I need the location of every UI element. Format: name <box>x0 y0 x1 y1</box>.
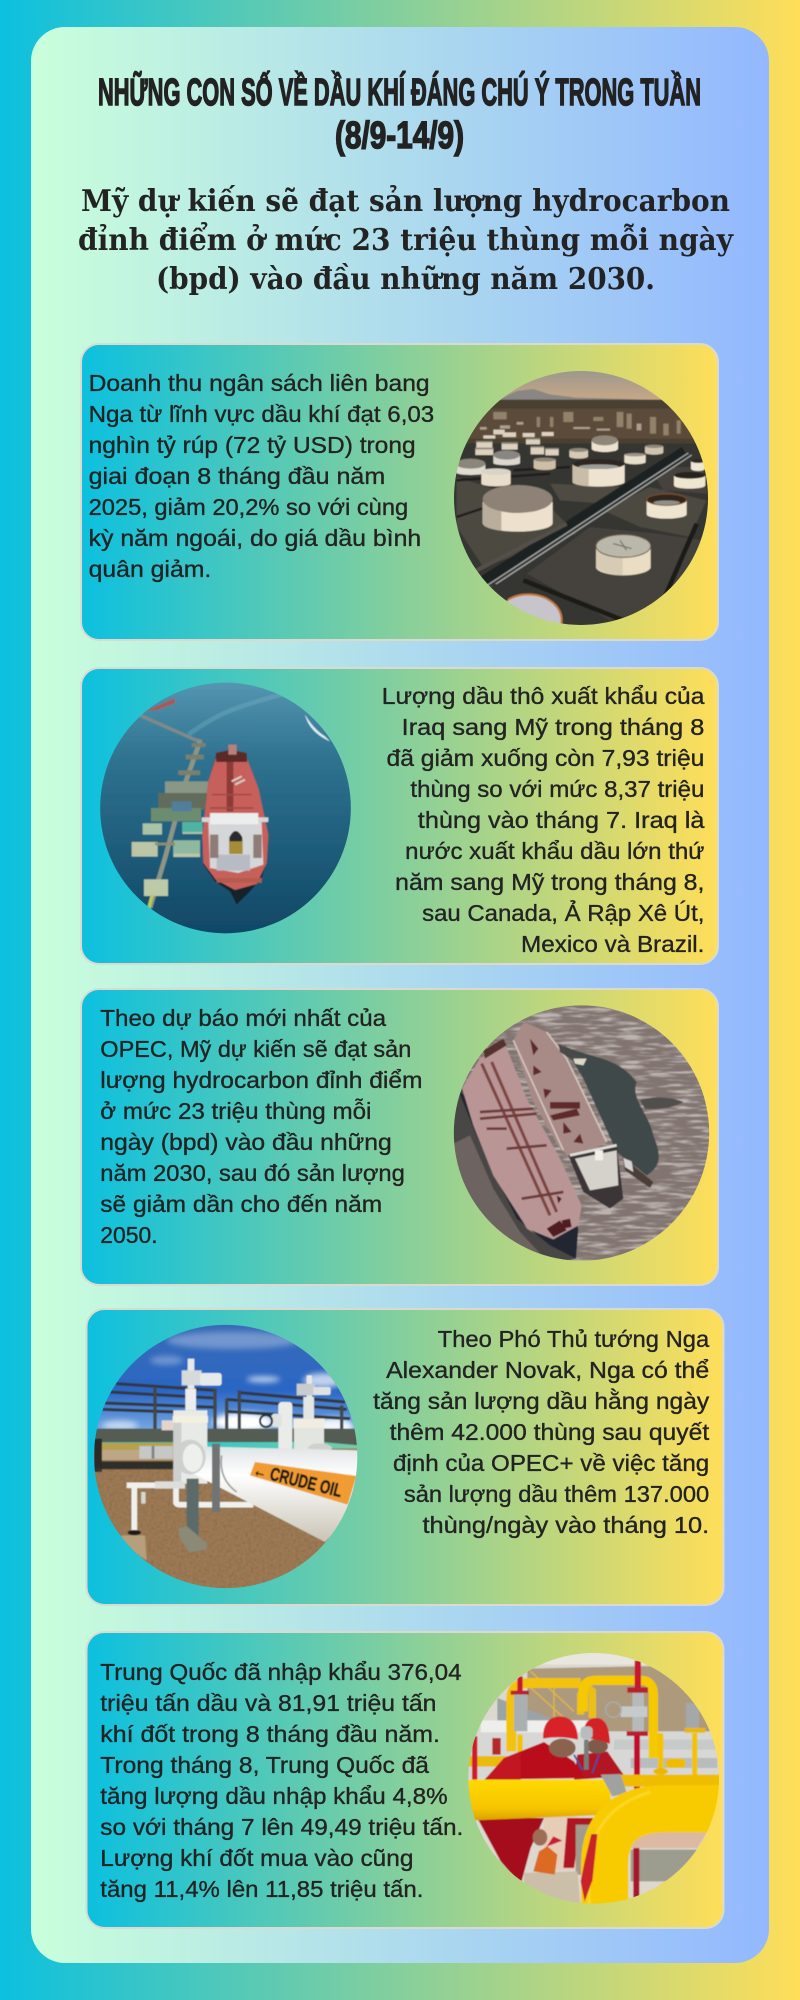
text: card 3: năm 2030, sau đó sản lượng <box>100 1160 405 1186</box>
text: card 5: tăng 11,4% lên 11,85 triệu tấn. <box>100 1876 423 1902</box>
text: card 4: sản lượng dầu thêm 137.000 <box>404 1481 709 1507</box>
text: card 5: Trong tháng 8, Trung Quốc đã <box>100 1752 429 1778</box>
text: card 5 <box>100 1659 463 1902</box>
superstructure <box>202 817 268 873</box>
curved yellow pipe <box>605 1809 721 1908</box>
text: card 3: Theo dự báo mới nhất của <box>100 1005 386 1031</box>
text: card 2: Lượng dầu thô xuất khẩu của <box>382 683 705 709</box>
main pipe <box>185 1446 360 1542</box>
text: card 2: nước xuất khẩu dầu lớn thứ <box>405 838 704 864</box>
text: card 3: sẽ giảm dần cho đến năm <box>100 1191 382 1217</box>
text: card 2: đã giảm xuống còn 7,93 triệu <box>386 745 704 771</box>
text: card 3: lượng hydrocarbon đỉnh điểm <box>100 1067 423 1093</box>
text: card 2: Mexico và Brazil. <box>521 931 704 957</box>
text: card 1: 2025, giảm 20,2% so với cùng <box>89 494 408 520</box>
text: card 1 <box>89 370 434 582</box>
text: card 4: Alexander Novak, Nga có thể <box>386 1357 709 1383</box>
text: card 3: OPEC, Mỹ dự kiến sẽ đạt sản <box>100 1036 411 1062</box>
text: card 4: định của OPEC+ về việc tăng <box>393 1450 709 1476</box>
lower scene <box>544 1816 577 1870</box>
panel: card 3 OPEC forecast <box>81 989 718 1285</box>
photo: workers and yellow pipes <box>464 1648 724 1908</box>
text: card 5: tăng lượng dầu nhập khẩu 4,8% <box>100 1783 448 1809</box>
ship hull <box>202 748 268 905</box>
text: card 3: ngày (bpd) vào đầu những <box>100 1129 392 1155</box>
panel: card 1 Russia revenue <box>81 344 718 646</box>
text: card 5: triệu tấn dầu và 81,91 triệu tấn <box>100 1690 436 1716</box>
panel: card 5 China imports <box>86 1632 724 1928</box>
photo: oil storage tanks <box>454 371 708 625</box>
text: card 5: Trung Quốc đã nhập khẩu 376,04 <box>100 1659 462 1685</box>
upper yellow pipes <box>511 1683 581 1751</box>
panel: card 2 Iraq exports <box>81 668 718 964</box>
subtitle: Mỹ dự kiến sẽ đạt sản lượng hydrocarbon <box>81 184 730 219</box>
text: card 1: quân giảm. <box>89 556 211 582</box>
text: card 1: Nga từ lĩnh vực dầu khí đạt 6,03 <box>89 401 434 427</box>
text: card 4 <box>373 1326 710 1538</box>
photo: two tankers on water <box>450 1002 712 1264</box>
small white pipes <box>127 1485 253 1530</box>
text: card 5: so với tháng 7 lên 49,49 triệu tấn. <box>100 1814 463 1840</box>
text: card 3 <box>100 1005 423 1248</box>
subtitle <box>78 184 734 297</box>
red stems and valves <box>635 1661 641 1689</box>
text: card 1: Doanh thu ngân sách liên bang <box>89 370 430 396</box>
text: card 2: Iraq sang Mỹ trong tháng 8 <box>402 714 704 740</box>
text: card 4: Theo Phó Thủ tướng Nga <box>438 1326 709 1352</box>
yellow horizontal pipe <box>468 1780 611 1821</box>
text: card 2: thùng so với mức 8,37 triệu <box>410 776 704 802</box>
text: card 2: sau Canada, Ả Rập Xê Út, <box>422 898 704 926</box>
title: (8/9-14/9) <box>335 115 464 157</box>
text: card 4: tăng sản lượng dầu hằng ngày <box>373 1388 710 1414</box>
pipe label: ← CRUDE OIL <box>251 1459 344 1501</box>
text: card 1: giai đoạn 8 tháng đầu năm <box>89 463 385 489</box>
text: card 5: Lượng khí đốt mua vào cũng <box>100 1845 413 1871</box>
text: card 3: ở mức 23 triệu thùng mỗi <box>100 1098 371 1124</box>
photo: crude oil pipeline <box>90 1322 360 1589</box>
title <box>98 69 701 157</box>
text: card 2 <box>382 683 705 957</box>
tanks and valves <box>173 1410 207 1484</box>
text: card 1: nghìn tỷ rúp (72 tỷ USD) trong <box>89 432 416 458</box>
text: card 2: năm sang Mỹ trong tháng 8, <box>395 869 704 895</box>
text: card 4: thêm 42.000 thùng sau quyết <box>390 1419 710 1445</box>
subtitle: đỉnh điểm ở mức 23 triệu thùng mỗi ngày <box>78 221 734 258</box>
photo: tanker at jetty <box>95 678 357 940</box>
panel: card 4 Novak statement <box>86 1309 724 1605</box>
bottom tank <box>506 592 564 624</box>
text: card 2: thùng vào tháng 7. Iraq là <box>418 807 705 833</box>
text: card 4: thùng/ngày vào tháng 10. <box>422 1512 709 1538</box>
text: card 1: kỳ năm ngoái, do giá dầu bình <box>89 525 421 551</box>
text: card 5: khí đốt trong 8 tháng đầu năm. <box>100 1721 440 1747</box>
workers <box>574 1751 625 1780</box>
subtitle: (bpd) vào đầu những năm 2030. <box>156 262 655 297</box>
text: card 3: 2050. <box>100 1222 158 1248</box>
small tanks <box>475 430 559 455</box>
tanks <box>592 441 618 452</box>
